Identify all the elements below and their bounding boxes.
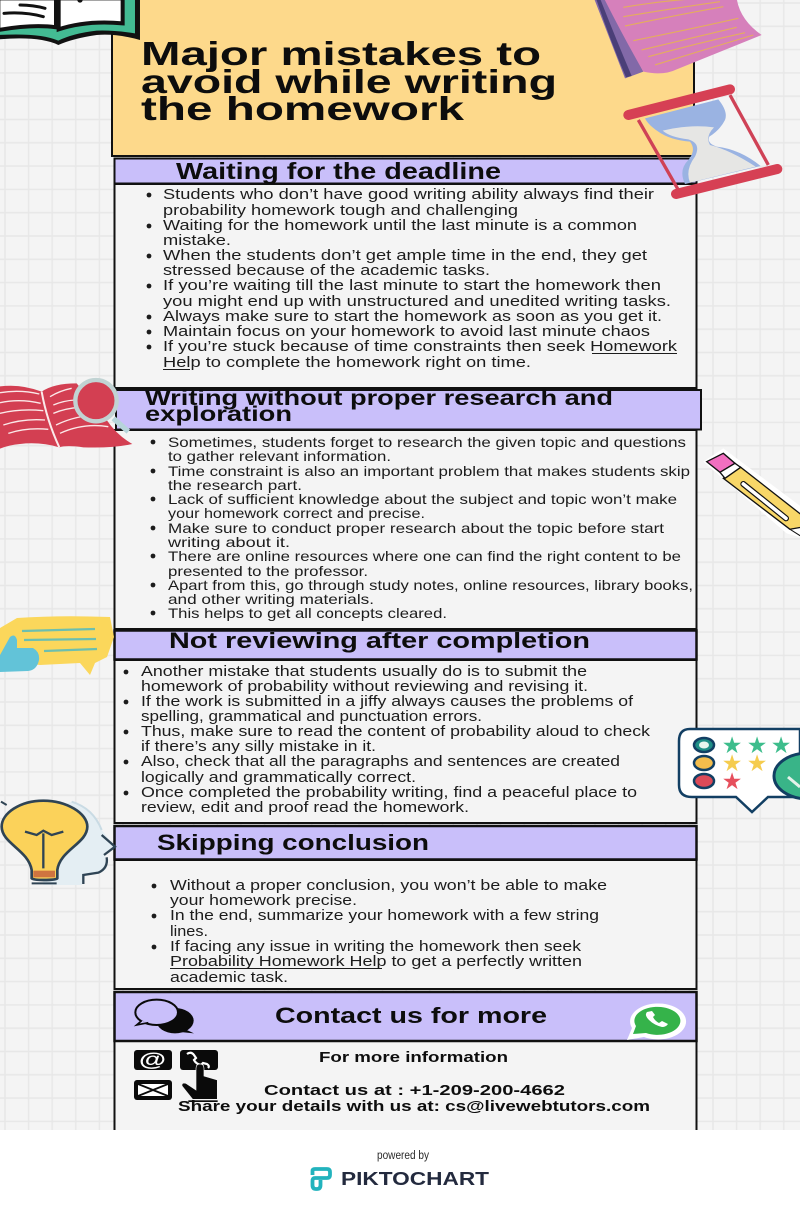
icon: rating bubble: ★ [722,751,742,777]
icon: whatsapp [627,1003,686,1040]
icon: open book top left [0,0,140,45]
panel: writing without proper research [114,387,701,629]
icon: pink book [594,0,762,78]
icon: chat bubbles [135,1000,194,1033]
title: Major mistakes to [141,35,541,72]
icon: at sign: @ [139,1050,166,1071]
bullet list: Students who don’t have good writing ability always find their [163,187,654,203]
bullet list: Once completed the probability writing, find a peaceful place to [141,785,637,801]
piktochart logo [312,1169,489,1189]
heading: Skipping conclusion [157,830,429,855]
bullet list: Apart from this, go through study notes, online resources, library books, [168,577,693,593]
bullet list: Sometimes, students forget to research the given topic and questions [168,434,686,450]
bullet list: Thus, make sure to read the content of probability aloud to check [141,724,651,740]
bullet list [147,187,678,371]
contact details: For more information [319,1050,508,1066]
bullet list: If facing any issue in writing the homework then seek [170,939,582,955]
bullet list: the research part. [168,477,302,493]
bullet list: Maintain focus on your homework to avoid last minute chaos [163,324,650,340]
bullet list: Make sure to conduct proper research about the topic before start [168,520,664,536]
title: avoid while writing [141,63,557,100]
bullet list: you might end up with unstructured and unedited writing tasks. [163,294,671,310]
contact details: Share your details with us at: cs@livewebtutors.com [178,1099,650,1115]
bullet list [124,664,651,816]
icon: rating bubble: ★ [747,733,767,759]
piktochart logo: PIKTOCHART [341,1169,489,1189]
icon: rating bubble: ★ [722,733,742,759]
bullet list: review, edit and proof read the homework. [141,800,469,816]
bullet list: presented to the professor. [168,563,368,579]
bullet list: writing about it. [167,534,290,550]
icon: rating bubble: ★ [722,769,742,795]
bullet list: logically and grammatically correct. [141,770,416,786]
bullet list: When the students don’t get ample time in the end, they get [163,248,647,264]
bullet list: mistake. [163,233,231,249]
heading: exploration [145,403,292,426]
icon: pencil [703,448,800,538]
bullet list: In the end, summarize your homework with a few string [170,908,599,924]
icon: light bulb and head [1,801,115,885]
icon: envelope [134,1080,172,1100]
bullet list: stressed because of the academic tasks. [163,263,490,279]
title [141,35,557,127]
icon: at sign [134,1050,172,1071]
bullet list [151,434,693,621]
bullet list: probability homework tough and challenging [163,203,518,219]
icon: rating bubble: ★ [747,751,767,777]
contact details [178,1050,650,1115]
bullet list: Lack of sufficient knowledge about the subject and topic won’t make [168,491,677,507]
bullet list: lines. [170,924,208,940]
bullet list: spelling, grammatical and punctuation errors. [141,709,482,725]
panel: not reviewing after completion [114,628,696,823]
bullet list: There are online resources where one can find the right content to be [168,548,681,564]
bullet list: Also, check that all the paragraphs and sentences are created [141,754,620,770]
bullet list: Waiting for the homework until the last minute is a common [163,218,637,234]
heading: Not reviewing after completion [169,628,590,653]
bullet list: Another mistake that students usually do is to submit the [141,664,587,680]
bullet list [152,878,607,986]
powered by: powered by [377,1150,429,1162]
icon: rating bubble [679,729,800,812]
icon: pointing hand [182,1064,218,1102]
icon: phone [180,1050,218,1070]
heading: Contact us for more [275,1003,547,1028]
bullet list: If the work is submitted in a jiffy always causes the problems of [141,694,634,710]
panel: title [112,0,694,156]
bullet list: academic task. [170,970,288,986]
bullet list: Always make sure to start the homework as soon as you get it. [163,309,662,325]
contact details: Contact us at : +1-209-200-4662 [264,1083,565,1099]
bullet list: Time constraint is also an important problem that makes students skip [168,463,690,479]
bullet list: homework of probability without reviewing and revising it. [141,679,588,695]
icon: rating bubble: ★ [771,733,791,759]
heading: Writing without proper research and [145,387,613,410]
icon: hourglass [628,89,777,194]
bullet list: and other writing materials. [168,591,374,607]
bullet list: Help to complete the homework right on time. [163,355,531,371]
bullet list: If you’re waiting till the last minute to start the homework then [163,278,661,294]
bullet list: Without a proper conclusion, you won’t be able to make [170,878,607,894]
heading: Waiting for the deadline [176,158,501,184]
bullet list: Probability Homework Help to get a perfectly written [170,954,582,970]
title: the homework [141,90,465,127]
bullet list: If you’re stuck because of time constraints then seek Homework [163,339,678,355]
panel: waiting for the deadline [114,158,696,388]
bullet list: if there’s any silly mistake in it. [141,739,376,755]
panel: skipping conclusion [114,826,696,989]
icon: open book with magnifier [0,380,132,449]
bullet list: your homework correct and precise. [168,505,425,521]
icon: thumbs up bubble [0,616,114,675]
heading [145,387,613,426]
bullet list: your homework precise. [170,893,357,909]
panel: contact [114,992,696,1130]
bullet list: This helps to get all concepts cleared. [168,605,447,621]
bullet list: to gather relevant information. [168,448,391,464]
